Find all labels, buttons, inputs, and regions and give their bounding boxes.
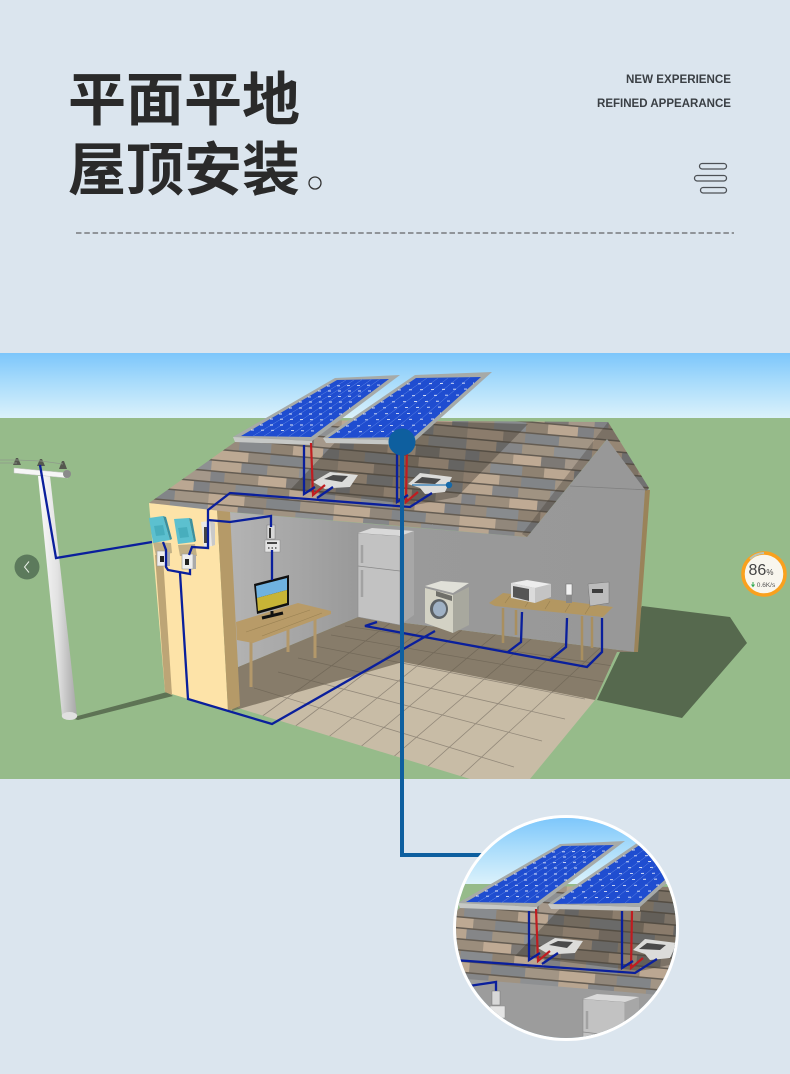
- title end circle: [309, 177, 321, 189]
- title: 平面平地: [68, 68, 300, 133]
- pole shadow: [70, 692, 173, 720]
- house scene illustration: [0, 353, 790, 788]
- washing machine: [425, 581, 469, 633]
- inverter on wall: [201, 521, 215, 547]
- fridge: [358, 528, 414, 625]
- title: [68, 68, 300, 203]
- solar inverter left: [313, 472, 358, 489]
- solar inverter right: [408, 473, 452, 494]
- english subtitle: REFINED APPEARANCE: [597, 96, 731, 110]
- indoor switch box: [265, 525, 280, 552]
- solar panel left: [233, 375, 400, 445]
- speed gauge widget: 86%: [749, 562, 773, 579]
- table with appliances: [489, 580, 613, 660]
- speed gauge widget: 0.6K/s: [757, 582, 776, 589]
- previous arrow button: [14, 554, 40, 580]
- electric meter left: [149, 516, 172, 543]
- right wall edge: [634, 490, 650, 652]
- breaker boxes: [157, 551, 196, 569]
- house ground shadow: [597, 606, 747, 718]
- utility pole: [0, 458, 77, 720]
- table with monitor: [236, 575, 331, 687]
- title: 屋顶安装: [68, 138, 300, 203]
- icon: three stacked bars: [694, 164, 726, 193]
- small callout pointer: [412, 482, 452, 488]
- floor: [232, 617, 635, 788]
- english subtitle: [597, 72, 731, 110]
- roof: [149, 420, 649, 537]
- main callout leader line: [388, 428, 486, 857]
- electric meter right: [174, 518, 196, 544]
- speed gauge widget: [743, 553, 785, 595]
- magnified lens: solar panels on roof: [453, 815, 679, 1041]
- english subtitle: NEW EXPERIENCE: [626, 72, 731, 86]
- sky: [0, 353, 790, 419]
- interior walls: [228, 438, 649, 667]
- red cables: [311, 443, 418, 502]
- grass: [0, 418, 790, 779]
- solar panel right: [323, 372, 492, 445]
- cream end wall: [149, 503, 240, 711]
- blue wiring: [40, 445, 602, 724]
